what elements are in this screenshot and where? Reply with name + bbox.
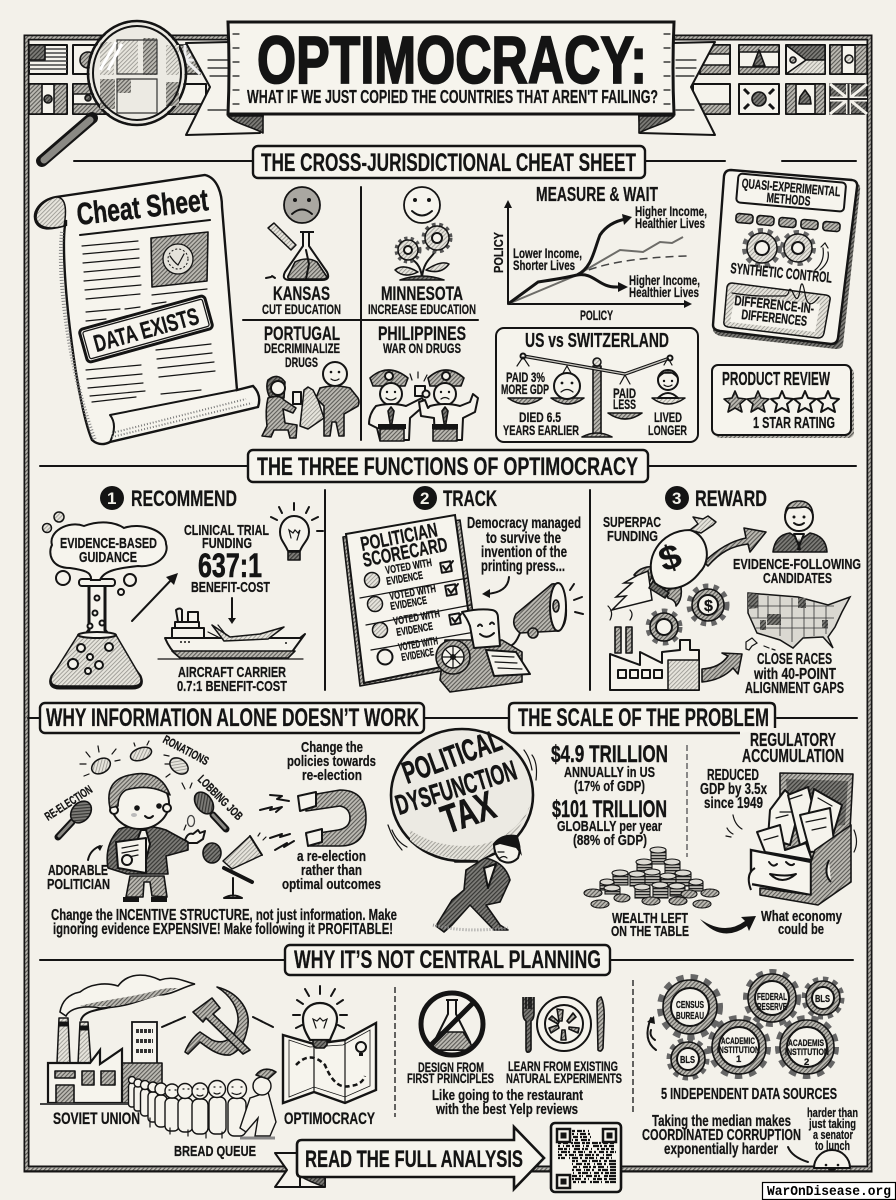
- text: WEALTH LEFT: [612, 910, 688, 927]
- callout: median: Taking the median makes: [652, 1113, 791, 1130]
- flag: Mexico: [29, 84, 67, 114]
- politician figure: [107, 774, 205, 902]
- panel: US vs Switzerland: DIED 6.5: [519, 409, 561, 425]
- icon: optimocracy bulb and map: [283, 986, 376, 1103]
- text: What economy: [761, 908, 842, 925]
- boulder: POLITICAL: [397, 722, 506, 791]
- conclusion text: [51, 907, 397, 938]
- column: recommend: AIRCRAFT CARRIER: [178, 664, 286, 681]
- callout: harder than lunch: just taking: [808, 1116, 856, 1131]
- flags strip: [29, 45, 867, 114]
- boulder: [388, 722, 536, 861]
- chart: measure and wait: Healthier Lives: [629, 284, 699, 300]
- column: reward: ALIGNMENT GAPS: [745, 680, 844, 697]
- panel: politician scorecard: VOTED WITH: [388, 583, 437, 603]
- panel: politician scorecard: POLITICIAN: [359, 519, 440, 556]
- panel: quasi-experimental methods tablet: QUASI-EXPERIMENTAL: [741, 176, 841, 199]
- heading: 1 recommend: 1: [107, 489, 116, 508]
- icon: data-source gears: ACADEMIC: [721, 1036, 755, 1047]
- label: Portugal: PORTUGAL: [264, 324, 340, 345]
- heading: 3 reward: [665, 486, 767, 511]
- text: LEARN FROM EXISTING: [508, 1059, 618, 1074]
- stats: political dysfunction cost: $4.9 TRILLION: [551, 741, 668, 768]
- text: SOVIET UNION: [53, 1109, 140, 1128]
- microphones: [58, 789, 226, 837]
- icon: star rating: [724, 391, 839, 412]
- icon: light bulb: [271, 503, 323, 560]
- panel: politician scorecard: VOTED WITH: [397, 635, 439, 654]
- call to action: read the full analysis: [275, 1127, 544, 1189]
- callout: harder than lunch: [788, 1105, 858, 1162]
- panel: US vs Switzerland: LESS: [613, 396, 636, 412]
- boulder: TAX: [436, 783, 501, 843]
- chart: measure and wait: Lower Income,: [513, 245, 582, 261]
- icon: data-source gears: BUREAU: [676, 1011, 704, 1022]
- section heading: cheat sheet: [74, 146, 856, 178]
- text: NATURAL EXPERIMENTS: [506, 1071, 622, 1086]
- icon: fork plate knife: [523, 997, 604, 1052]
- column: reward: with 40-POINT: [753, 666, 836, 683]
- illustration: adorable politician: [42, 732, 266, 902]
- illustration: kneeling helper and person: [262, 362, 359, 438]
- icon: flask with cloud: GUIDANCE: [79, 549, 137, 566]
- stats: political dysfunction cost: (17% of GDP): [574, 778, 645, 795]
- checkboxes: [440, 561, 461, 625]
- panel: US vs Switzerland: PAID: [613, 385, 636, 401]
- panel: US vs Switzerland: [496, 328, 698, 442]
- man head: [494, 835, 522, 863]
- regulatory accumulation: REGULATORY: [750, 730, 836, 750]
- heading: 3 reward: REWARD: [695, 486, 767, 511]
- heading: 2 track: 2: [420, 489, 429, 508]
- icon: data-source gears: [647, 973, 841, 1077]
- chart: measure and wait: Higher Income,: [635, 203, 707, 219]
- panel: politician scorecard: SCORECARD: [361, 534, 449, 572]
- panel: product review: PRODUCT REVIEW: [722, 369, 830, 389]
- panel: politician scorecard: EVIDENCE: [385, 570, 424, 588]
- icon: printing press: [436, 609, 530, 692]
- conclusion text: ignoring evidence EXPENSIVE! Make following it PROFITABLE!: [53, 921, 393, 938]
- boulder: DYSFUNCTION: [392, 755, 520, 821]
- panel: quasi-experimental methods tablet: METHODS: [766, 190, 811, 209]
- illustration: bread queue: [128, 1069, 276, 1160]
- flag: Ireland: [830, 45, 867, 74]
- icon: money bag rocket: [612, 516, 716, 610]
- floating labels: RONATIONS: [161, 732, 211, 768]
- section heading: not central planning: [40, 945, 853, 975]
- newspaper image: [151, 232, 208, 287]
- callout: change policies: re-election: [302, 767, 362, 784]
- section heading: three functions: THE THREE FUNCTIONS OF OPTIMOCRACY: [257, 453, 638, 481]
- heading: 1 recommend: [100, 486, 237, 511]
- callout: re-election outcomes: optimal outcomes: [282, 876, 381, 893]
- flag: Lebanon: [739, 45, 779, 74]
- callout: re-election outcomes: [282, 848, 381, 893]
- title banner: [186, 22, 715, 135]
- regulatory accumulation: ACCUMULATION: [742, 746, 844, 766]
- stat: clinical trial: [184, 522, 270, 596]
- callout: harder than lunch: harder than: [807, 1105, 858, 1120]
- label: Portugal: DRUGS: [285, 354, 318, 370]
- panel: cheat sheet scroll: [35, 175, 259, 444]
- watermark: WarOnDisease.org: [767, 1185, 891, 1200]
- chart: measure and wait: POLICY: [580, 307, 613, 323]
- flag: stripes behind ribbon: [168, 45, 206, 114]
- panel: politician scorecard: EVIDENCE: [400, 646, 435, 664]
- illustration: boulder and man: [388, 722, 536, 932]
- arrow down: [228, 598, 236, 624]
- icon: sad face: [284, 187, 320, 223]
- callout: re-election outcomes: a re-election: [297, 848, 366, 865]
- column: recommend: 0.7:1 BENEFIT-COST: [177, 678, 287, 695]
- icon: factory: [608, 606, 699, 690]
- chart: measure and wait: POLICY: [491, 232, 506, 273]
- callout: change policies: [287, 739, 376, 784]
- column: reward: CANDIDATES: [763, 570, 832, 587]
- difference-in-differences card: DIFFERENCES: [741, 306, 808, 329]
- arrow: [702, 653, 742, 682]
- callout: median: exponentially harder: [664, 1141, 778, 1158]
- panel: US vs Switzerland: US vs SWITZERLAND: [525, 330, 669, 352]
- icon: mic and megaphone on stand: [203, 833, 266, 898]
- politician faces: [364, 572, 392, 664]
- icon: flask with cloud: [42, 512, 167, 688]
- icon: pile of coins: [584, 847, 719, 908]
- icon: data-source gears: BLS: [815, 994, 830, 1005]
- stamp: data exists: [79, 295, 213, 363]
- label: Philippines: PHILIPPINES: [378, 324, 466, 345]
- icon: horseshoe magnet: [260, 790, 366, 850]
- stamp: data exists: DATA EXISTS: [91, 303, 202, 358]
- panel: politician scorecard: [343, 515, 480, 686]
- label: Kansas: [262, 284, 341, 317]
- label: Minnesota: INCREASE EDUCATION: [368, 301, 476, 317]
- label: Portugal: [264, 324, 340, 370]
- quote: democracy: invention of the: [481, 544, 567, 561]
- quote: democracy: printing press...: [481, 558, 565, 575]
- chart: measure and wait: Healthier Lives: [635, 215, 705, 231]
- stats: political dysfunction cost: [551, 741, 668, 849]
- column: track: [343, 486, 583, 692]
- section heading: scale of the problem: THE SCALE OF THE PROBLEM: [518, 704, 769, 732]
- icon: data-source gears: 2: [804, 1057, 809, 1068]
- text: OPTIMOCRACY: [284, 1109, 375, 1128]
- panel: US vs Switzerland: YEARS EARLIER: [503, 422, 579, 438]
- icon: candidate: [773, 501, 827, 552]
- callout: re-election outcomes: rather than: [301, 862, 362, 879]
- quote: democracy: Democracy managed: [467, 515, 581, 532]
- label: Philippines: [378, 324, 466, 356]
- flag: Canada: [786, 84, 825, 114]
- panel: politician scorecard: VOTED WITH: [384, 557, 433, 577]
- panel: quasi-experimental methods tablet: SYNTHETIC CONTROL: [730, 260, 833, 287]
- text: with the best Yelp reviews: [435, 1101, 578, 1118]
- icon: gears: [649, 587, 726, 642]
- callout: change policies: Change the: [301, 739, 363, 756]
- coins: [80, 741, 192, 789]
- quadrant: natural experiments: [243, 187, 478, 441]
- icon: gears: [745, 231, 828, 270]
- arrow: wealth to economy: [700, 916, 756, 934]
- panel: product review: 1 STAR RATING: [753, 415, 835, 432]
- chart: measure and wait: Shorter Lives: [513, 257, 575, 273]
- icon: gear flower: [395, 225, 450, 280]
- illustration: soviet factory: [40, 975, 195, 1104]
- regulatory accumulation: REDUCED: [707, 767, 759, 784]
- column: reward: SUPERPAC: [603, 514, 661, 531]
- icon: filing box with papers: [749, 773, 853, 905]
- call to action: read the full analysis: READ THE FULL ANALYSIS: [305, 1146, 523, 1173]
- quote: democracy: to survive the: [486, 530, 561, 547]
- callout: median: [642, 1113, 801, 1158]
- flag: South Korea: [739, 84, 779, 114]
- icon: happy face: [404, 187, 440, 223]
- stat: clinical trial: CLINICAL TRIAL: [184, 522, 269, 539]
- panel: politician scorecard: EVIDENCE: [389, 595, 428, 613]
- illustration: bread queue: BREAD QUEUE: [174, 1143, 256, 1160]
- section heading: why information alone: WHY INFORMATION ALONE DOESN’T WORK: [46, 704, 419, 732]
- icon: aircraft carrier: [158, 608, 305, 659]
- heading: Cheat Sheet: Cheat Sheet: [75, 182, 210, 232]
- icon: US map: [746, 593, 850, 650]
- panel: product review: [712, 365, 854, 438]
- icon: scales: [508, 354, 685, 437]
- heading: 2 track: TRACK: [443, 486, 497, 511]
- conclusion text: Change the INCENTIVE STRUCTURE, not just information. Make: [51, 907, 397, 924]
- flag: Argentina right: [700, 45, 730, 74]
- difference-in-differences card: DIFFERENCE-IN-: [734, 292, 815, 316]
- section heading: three functions: [40, 450, 856, 482]
- panel: politician scorecard: EVIDENCE: [395, 621, 434, 639]
- quote: democracy: [467, 515, 581, 598]
- flag: Philippines: [786, 45, 825, 74]
- column: reward: [603, 486, 861, 697]
- label: Portugal: DECRIMINALIZE: [264, 340, 340, 356]
- difference-in-differences card: [724, 283, 830, 338]
- heading: 1 recommend: RECOMMEND: [131, 486, 237, 511]
- icon: prohibited flask: [421, 993, 483, 1055]
- icon: megaphone: [512, 583, 583, 645]
- illustration: adorable politician: LOBBING JOB: [195, 772, 246, 823]
- ribbon tails: [186, 42, 263, 135]
- regulatory accumulation: GDP by 3.5x: [700, 781, 767, 798]
- man: [436, 850, 510, 932]
- icon: hammer and sickle: [162, 987, 273, 1055]
- icon: data-source gears: RESERVE: [757, 1002, 787, 1013]
- text: DESIGN FROM: [418, 1060, 484, 1075]
- icon: data-source gears: FEDERAL: [757, 992, 787, 1003]
- callout: harder than lunch: a senator: [813, 1127, 853, 1142]
- QR code: [551, 1123, 621, 1192]
- section heading: not central planning: WHY IT’S NOT CENTRAL PLANNING: [294, 946, 601, 974]
- icon: data-source gears: ACADEMIS: [788, 1038, 824, 1049]
- illustration: adorable politician: RE-ELECTION: [42, 782, 95, 824]
- flag: UK: [830, 84, 867, 114]
- icon: data-source gears: 1: [736, 1054, 742, 1065]
- title: OPTIMOCRACY:: [257, 23, 647, 98]
- panel: quasi-experimental methods tablet: [713, 170, 860, 349]
- stat: clinical trial: 637:1: [198, 547, 262, 585]
- label: Minnesota: MINNESOTA: [381, 284, 463, 305]
- heading: 2 track: [413, 486, 497, 511]
- text: could be: [778, 921, 824, 938]
- heading: MEASURE & WAIT: [536, 184, 658, 206]
- column: reward: CLOSE RACES: [757, 651, 832, 668]
- label: Minnesota: [368, 284, 476, 317]
- panel: US vs Switzerland: LIVED: [654, 409, 682, 425]
- arrow: [132, 573, 178, 621]
- column: reward: FUNDING: [607, 528, 658, 545]
- stats: political dysfunction cost: (88% of GDP): [573, 832, 647, 849]
- label: Kansas: KANSAS: [273, 284, 330, 305]
- flag: Japan: [73, 45, 109, 74]
- stat: clinical trial: BENEFIT-COST: [191, 579, 270, 596]
- arrow: [704, 528, 766, 566]
- callout: median: COORDINATED CORRUPTION: [642, 1127, 801, 1144]
- icon: gears: $: [704, 598, 713, 615]
- subtitle: WHAT IF WE JUST COPIED THE COUNTRIES THAT AREN'T FAILING?: [247, 87, 658, 107]
- icon: data-source gears: INSTITUTION: [717, 1045, 760, 1056]
- heading: 3 reward: 3: [672, 489, 681, 508]
- regulatory accumulation: [700, 730, 856, 905]
- flag: USA: [29, 45, 67, 74]
- panel: US vs Switzerland: PAID 3%: [506, 369, 545, 385]
- icon: peeking smiley: [814, 1150, 850, 1170]
- text: ON THE TABLE: [611, 923, 689, 940]
- label: Philippines: WAR ON DRUGS: [383, 340, 461, 356]
- icon: money bag rocket: $: [654, 537, 687, 580]
- flag: Argentina: [73, 84, 109, 114]
- illustration: adorable politician: ADORABLE: [48, 862, 108, 879]
- illustration: police officers: [369, 370, 478, 441]
- column: recommend: [42, 486, 323, 695]
- illustration: adorable politician: POLITICIAN: [47, 876, 110, 893]
- icon: data-source gears: BLS: [680, 1055, 695, 1066]
- icon: magnifying glass: [42, 21, 186, 161]
- stat: clinical trial: FUNDING: [202, 535, 252, 552]
- regulatory accumulation: since 1949: [704, 795, 763, 812]
- callout: change policies: policies towards: [287, 753, 376, 770]
- panel: US vs Switzerland: MORE GDP: [501, 381, 549, 397]
- arrow: [88, 845, 103, 860]
- stats: political dysfunction cost: $101 TRILLION: [552, 796, 667, 823]
- chart: measure and wait: [491, 184, 707, 323]
- icon: data-source gears: INSTITUTION: [785, 1047, 829, 1058]
- stats: political dysfunction cost: GLOBALLY per year: [557, 818, 662, 835]
- chart: measure and wait: Higher Income,: [629, 272, 700, 288]
- buttons: [736, 213, 840, 232]
- text: FIRST PRINCIPLES: [407, 1071, 494, 1086]
- icon: cracked flask: [266, 223, 328, 280]
- callout: harder than lunch: to lunch: [815, 1138, 850, 1153]
- stats: political dysfunction cost: ANNUALLY in US: [564, 764, 655, 781]
- flag: Netherlands: [693, 84, 730, 114]
- icon: flask with cloud: EVIDENCE-BASED: [60, 535, 157, 552]
- label: Kansas: CUT EDUCATION: [262, 301, 341, 317]
- panel: politician scorecard: VOTED WITH: [392, 608, 441, 628]
- panel: US vs Switzerland: LONGER: [648, 422, 687, 438]
- section heading: cheat sheet: THE CROSS-JURISDICTIONAL CHEAT SHEET: [261, 149, 636, 177]
- icon: data-source gears: CENSUS: [676, 1000, 704, 1011]
- text: Like going to the restaurant: [432, 1087, 583, 1104]
